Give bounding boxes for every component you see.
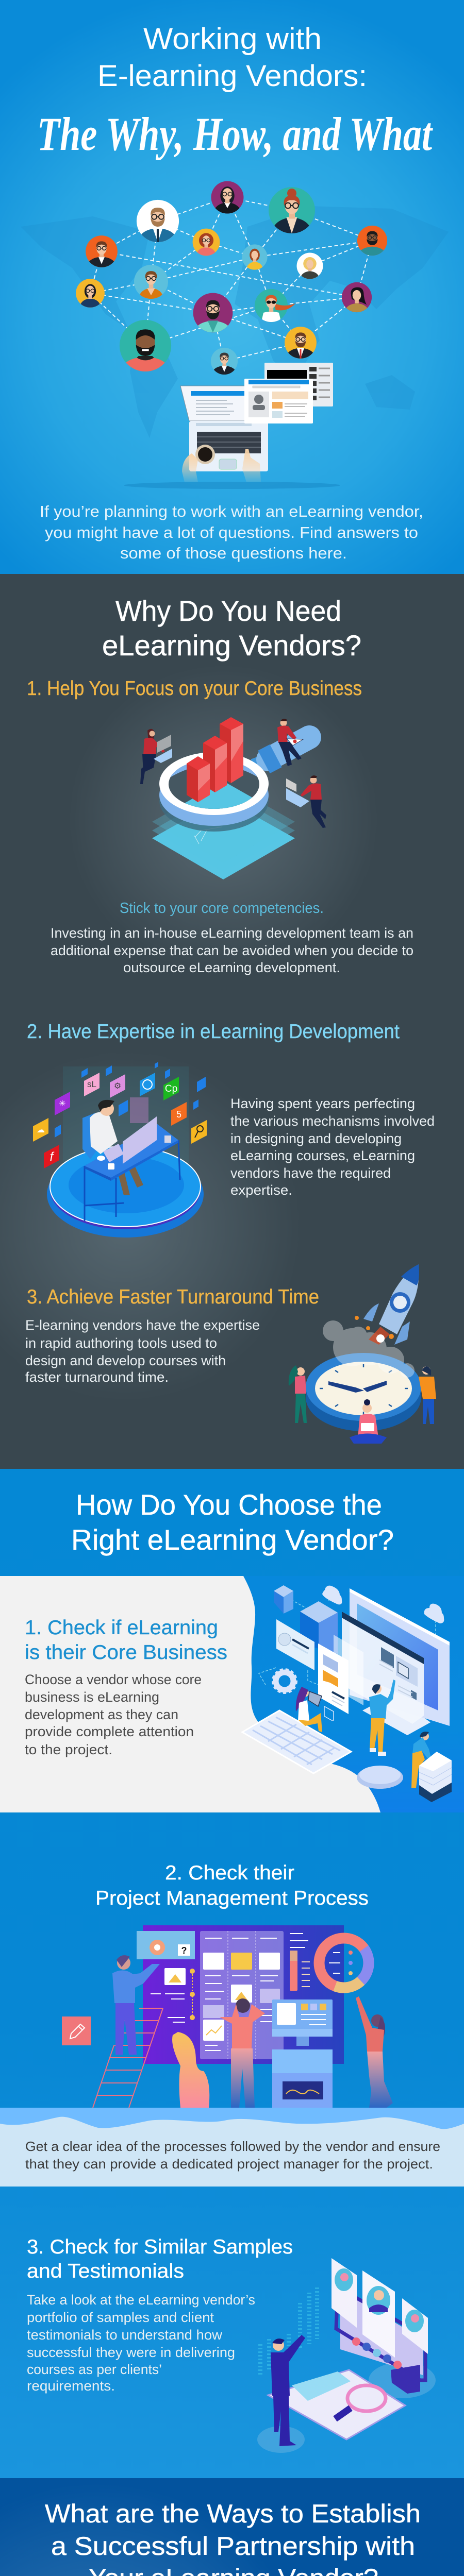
- app icons: [33, 1073, 207, 1168]
- app icons: ⚙: [114, 1082, 121, 1091]
- expertise text: vendors have the required: [230, 1165, 391, 1181]
- tagline: Stick to your core competencies.: [120, 900, 324, 917]
- card: check core business: development as they can: [25, 1707, 178, 1722]
- testimonials text: Take a look at the eLearning vendor’s: [27, 2292, 255, 2308]
- intro text: some of those questions here.: [120, 544, 347, 562]
- expertise text: expertise.: [230, 1182, 292, 1198]
- section background: what: [0, 2478, 464, 2576]
- person: man pointing: [369, 1680, 395, 1756]
- avatar: woman top purple: [211, 181, 243, 213]
- avatars: [76, 181, 387, 375]
- expertise text: the various mechanisms involved: [230, 1113, 435, 1129]
- app icons: f: [50, 1150, 55, 1164]
- kiosk: [272, 1999, 333, 2108]
- body text: outsource eLearning development.: [123, 960, 340, 975]
- panel: what: [25, 2499, 439, 2576]
- panel: why: [25, 595, 436, 1444]
- avatar: man orange left: [86, 235, 118, 267]
- heading: step 3: and Testimonials: [27, 2260, 184, 2282]
- illustration: reviewing profiles: [257, 2258, 436, 2453]
- testimonials text: testimonials to understand how: [27, 2327, 223, 2343]
- heading: step 2: [95, 1862, 369, 1909]
- ladder: [93, 2008, 163, 2108]
- heading: step 3: 3. Check for Similar Samples: [27, 2236, 293, 2258]
- illustration: magnifier with bar chart: [140, 717, 326, 879]
- turnaround text: E-learning vendors have the expertise: [25, 1317, 260, 1333]
- person: woman with laptop: [140, 729, 172, 784]
- testimonials text: requirements.: [27, 2378, 115, 2394]
- intro text: [40, 502, 423, 562]
- section background: how: [0, 1469, 464, 2478]
- plant: [172, 2032, 209, 2108]
- turnaround text: design and develop courses with: [25, 1353, 226, 1368]
- avatar: man orange right: [357, 226, 387, 256]
- subheading 1: 1. Help You Focus on your Core Business: [27, 677, 362, 700]
- heading: eLearning Vendors?: [102, 629, 361, 662]
- app icons: sL: [87, 1079, 96, 1089]
- body text: Investing in an in-house eLearning development team is an: [51, 925, 413, 941]
- heading: What are the Ways to Establish: [45, 2499, 421, 2528]
- body text: additional expense that can be avoided when you decide to: [51, 943, 413, 958]
- heading: How Do You Choose the: [76, 1488, 382, 1521]
- avatar: woman yellow left: [76, 279, 105, 308]
- heading: [45, 2499, 421, 2576]
- avatar: bearded man purple: [193, 293, 233, 332]
- illustration: project board with team: [62, 1925, 393, 2108]
- laptop with browser windows and hands: [124, 363, 340, 489]
- testimonials text: [27, 2292, 255, 2394]
- expertise text: Having spent years perfecting: [230, 1096, 415, 1111]
- illustration: isometric monitor and team: [242, 1585, 452, 1802]
- avatar: bearded man yellow: [285, 327, 317, 359]
- bright panel behind illustration: [242, 1576, 464, 1812]
- person: woman with tablet: [296, 1687, 322, 1732]
- world map backdrop: [21, 206, 449, 438]
- avatar: curly woman yellow: [193, 229, 220, 256]
- card: check core business: business is eLearning: [25, 1689, 159, 1705]
- person: man on ladder: [112, 1955, 160, 2055]
- illustration: rocket and stopwatch: [289, 1264, 436, 1444]
- expertise text: [230, 1096, 435, 1198]
- illustration: developer at desk: [33, 1062, 207, 1238]
- avatar: small woman pale: [242, 244, 268, 270]
- heading: step 2: Project Management Process: [95, 1887, 369, 1909]
- person: man at server: [411, 1732, 431, 1788]
- illustration: project board with team: ?: [181, 1945, 187, 1956]
- heading: Right eLearning Vendor?: [71, 1523, 394, 1556]
- body text: [51, 925, 413, 975]
- person: man centre: [220, 1998, 265, 2108]
- turnaround text: in rapid authoring tools used to: [25, 1335, 217, 1351]
- avatar: blonde woman white: [297, 252, 323, 279]
- person: man in suit: [271, 2335, 305, 2446]
- testimonials text: portfolio of samples and client: [27, 2310, 214, 2325]
- card: check core business: to the project.: [25, 1742, 112, 1757]
- title: [37, 22, 433, 160]
- card: check core business: is their Core Business: [25, 1641, 227, 1664]
- app icons: ✳: [59, 1099, 66, 1108]
- turnaround text: [25, 1317, 260, 1385]
- turnaround text: faster turnaround time.: [25, 1369, 169, 1385]
- expertise text: eLearning courses, eLearning: [230, 1148, 415, 1163]
- intro text: If you’re planning to work with an eLearning vendor,: [40, 502, 423, 520]
- intro text: you might have a lot of questions. Find answers to: [45, 523, 418, 541]
- server stack: [419, 1752, 452, 1802]
- avatar: man pale bottom: [211, 348, 238, 375]
- subheading 3: 3. Achieve Faster Turnaround Time: [27, 1286, 319, 1308]
- avatar: woman purple right: [342, 282, 372, 312]
- testimonials text: successful they were in delivering: [27, 2345, 235, 2360]
- heading: [71, 1488, 394, 1556]
- testimonials text: courses as per clients’: [27, 2362, 162, 2377]
- card: check core business: 1. Check if eLearning: [25, 1617, 218, 1639]
- person: man sitting on handle: [277, 719, 303, 766]
- app icons: 5: [176, 1109, 181, 1120]
- heading: step 2: 2. Check their: [165, 1862, 294, 1884]
- subheading 2: 2. Have Expertise in eLearning Development: [27, 1021, 400, 1043]
- callout band: project manager: that they can provide a dedicated project manager for the project.: [25, 2156, 433, 2172]
- section background: why: [0, 574, 464, 1469]
- person: man with laptop: [286, 775, 326, 828]
- expertise text: in designing and developing: [230, 1131, 402, 1146]
- icon: pencil tile: [62, 2016, 91, 2045]
- panel: how: [0, 1488, 464, 2453]
- heading: Why Do You Need: [115, 595, 341, 627]
- heading: a Successful Partnership with: [51, 2532, 415, 2561]
- network connection lines: [90, 197, 372, 361]
- avatar: bearded man large teal: [120, 320, 171, 371]
- person: man right: [419, 1366, 436, 1424]
- person: woman left: [289, 1365, 307, 1423]
- person: seated woman: [350, 1399, 387, 1444]
- avatar: centre woman pale: [134, 265, 168, 299]
- person: woman right: [356, 1996, 393, 2108]
- card: check core business: [0, 1576, 380, 1812]
- callout band: project manager: [0, 2108, 464, 2187]
- app icons: ☁: [37, 1126, 45, 1134]
- panel: intro: [21, 22, 449, 562]
- avatar: woman sunglasses teal: [255, 289, 295, 322]
- heading: step 3: [27, 2236, 293, 2282]
- card: check core business: Choose a vendor whose core: [25, 1672, 202, 1687]
- section background: intro: [0, 0, 464, 574]
- avatar: bearded man white: [137, 200, 179, 242]
- avatar: woman red hair teal: [269, 187, 315, 233]
- card: check core business: provide complete attention: [25, 1724, 194, 1739]
- title: E-learning Vendors:: [97, 59, 367, 93]
- callout band: project manager: Get a clear idea of the processes followed by the vendor and ensure: [25, 2139, 440, 2154]
- heading: [102, 595, 361, 662]
- app icons: Cp: [165, 1083, 177, 1094]
- title: Working with: [143, 22, 322, 56]
